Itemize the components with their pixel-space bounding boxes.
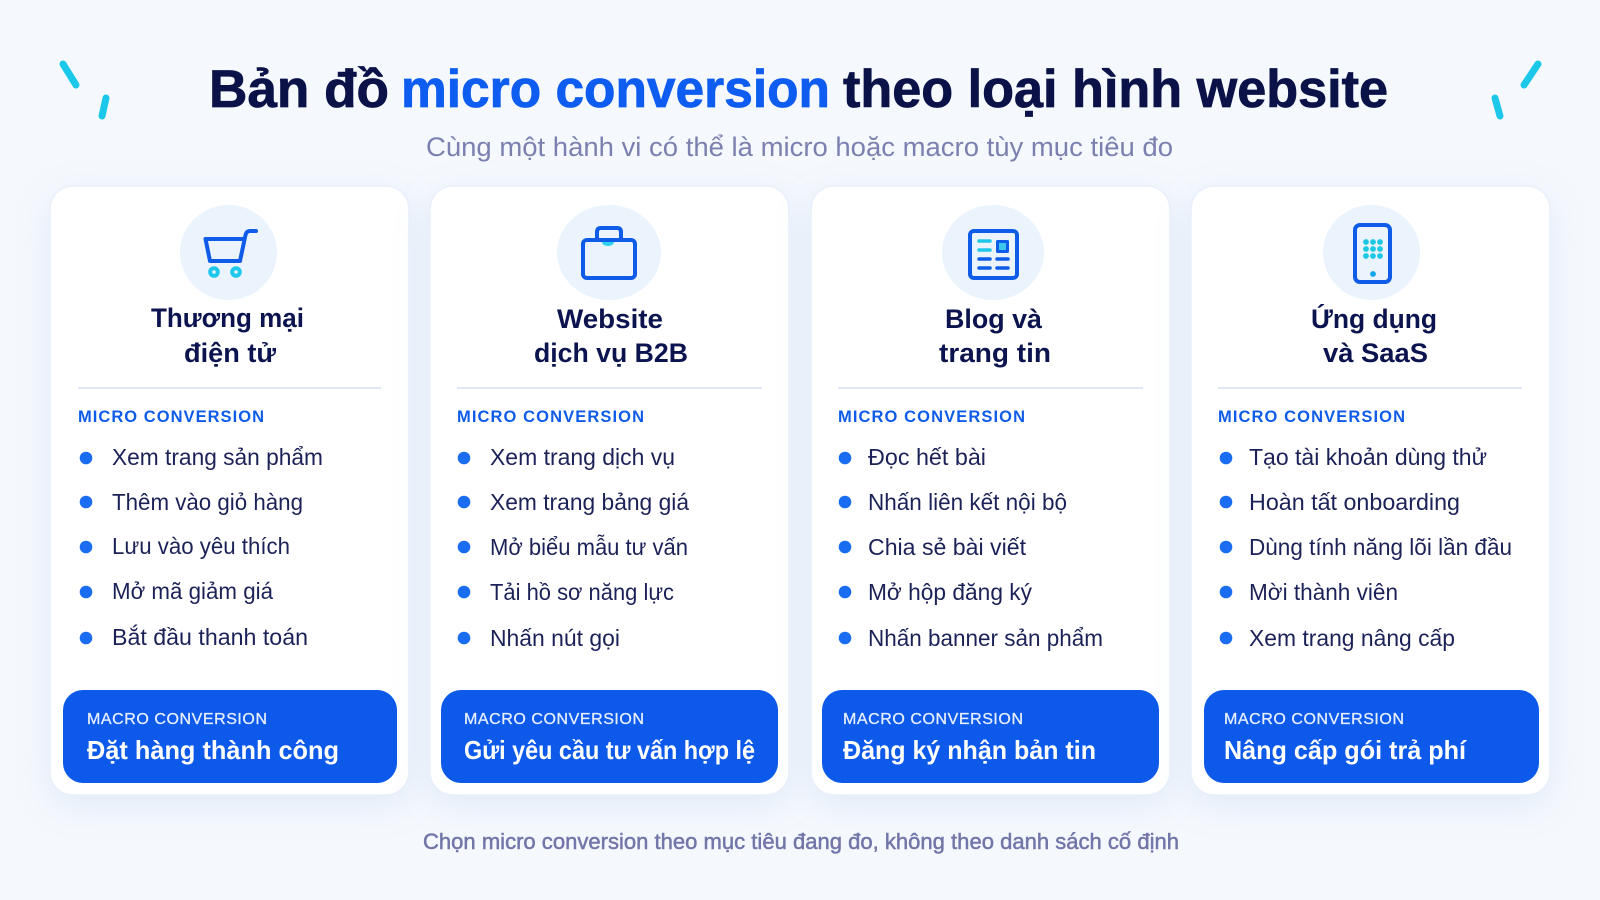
heading: trang tin — [939, 338, 1051, 368]
macro conversion box: MACRO CONVERSION — [843, 711, 1023, 728]
micro conversion list — [839, 444, 1103, 651]
micro conversion list: Tải hồ sơ năng lực — [490, 579, 674, 605]
heading — [939, 304, 1051, 368]
macro conversion box: MACRO CONVERSION — [464, 711, 644, 728]
micro conversion list: Xem trang sản phẩm — [112, 444, 323, 470]
title: Bản đồ — [209, 60, 389, 119]
micro conversion list: Xem trang nâng cấp — [1249, 625, 1455, 651]
footer note: Chọn micro conversion theo mục tiêu đang đo, không theo danh sách cố định — [423, 829, 1179, 854]
icon: briefcase — [583, 228, 635, 278]
micro conversion label: MICRO CONVERSION — [1218, 408, 1405, 426]
icon: newspaper — [970, 231, 1017, 278]
heading: Blog và — [945, 304, 1043, 334]
micro conversion list: Hoàn tất onboarding — [1249, 489, 1460, 515]
micro conversion list: Xem trang dịch vụ — [490, 444, 675, 470]
panel: Website dịch vụ B2B — [430, 186, 789, 795]
micro conversion label: MICRO CONVERSION — [78, 408, 264, 426]
heading: dịch vụ B2B — [534, 338, 688, 368]
panel: Thương mại điện tử — [50, 186, 409, 795]
micro conversion list: Tạo tài khoản dùng thử — [1249, 444, 1487, 470]
panel: Ứng dụng và SaaS — [1191, 186, 1550, 795]
micro conversion list: Nhấn nút gọi — [490, 625, 620, 651]
micro conversion list — [80, 444, 323, 650]
micro conversion list: Thêm vào giỏ hàng — [112, 489, 303, 515]
micro conversion list: Chia sẻ bài viết — [868, 534, 1027, 560]
heading — [1311, 303, 1437, 368]
title: theo loại hình website — [843, 60, 1388, 119]
micro conversion list: Mời thành viên — [1249, 579, 1398, 605]
macro conversion box: Nâng cấp gói trả phí — [1224, 735, 1467, 765]
heading: Ứng dụng — [1311, 303, 1437, 334]
heading: Thương mại — [151, 303, 304, 333]
decorative dashes right — [1495, 64, 1538, 116]
micro conversion list: Mở biểu mẫu tư vấn — [490, 534, 688, 560]
micro conversion list: Đọc hết bài — [868, 444, 986, 470]
icon: smartphone — [1355, 225, 1390, 282]
subtitle: Cùng một hành vi có thể là micro hoặc macro tùy mục tiêu đo — [426, 132, 1173, 162]
micro conversion list: Lưu vào yêu thích — [112, 533, 290, 559]
decorative dashes left — [63, 64, 106, 116]
macro conversion box: MACRO CONVERSION — [87, 711, 267, 728]
micro conversion list: Dùng tính năng lõi lần đầu — [1249, 534, 1512, 560]
micro conversion list: Mở mã giảm giá — [112, 578, 273, 604]
micro conversion list: Nhấn banner sản phẩm — [868, 625, 1103, 651]
heading: điện tử — [184, 338, 276, 368]
micro conversion list: Xem trang bảng giá — [490, 489, 689, 515]
heading: và SaaS — [1323, 338, 1428, 368]
micro conversion list: Mở hộp đăng ký — [868, 579, 1032, 605]
macro conversion box — [822, 690, 1159, 783]
micro conversion label: MICRO CONVERSION — [457, 408, 644, 426]
macro conversion box: Đặt hàng thành công — [87, 735, 339, 765]
macro conversion box: Gửi yêu cầu tư vấn hợp lệ — [464, 735, 755, 765]
macro conversion box — [441, 690, 778, 783]
panel: Blog và trang tin — [811, 186, 1170, 795]
title — [209, 60, 1388, 119]
micro conversion list: Nhấn liên kết nội bộ — [868, 489, 1067, 515]
heading — [534, 304, 688, 368]
macro conversion box — [1204, 690, 1539, 783]
macro conversion box: MACRO CONVERSION — [1224, 711, 1404, 728]
micro conversion list: Bắt đầu thanh toán — [112, 624, 308, 650]
heading: Website — [557, 304, 663, 334]
micro conversion list — [1220, 444, 1512, 651]
title: micro conversion — [401, 60, 830, 119]
heading — [151, 303, 304, 368]
macro conversion box — [63, 690, 397, 783]
icon: shopping cart — [206, 231, 256, 276]
micro conversion list — [458, 444, 689, 651]
macro conversion box: Đăng ký nhận bản tin — [843, 735, 1096, 765]
micro conversion label: MICRO CONVERSION — [838, 408, 1025, 426]
